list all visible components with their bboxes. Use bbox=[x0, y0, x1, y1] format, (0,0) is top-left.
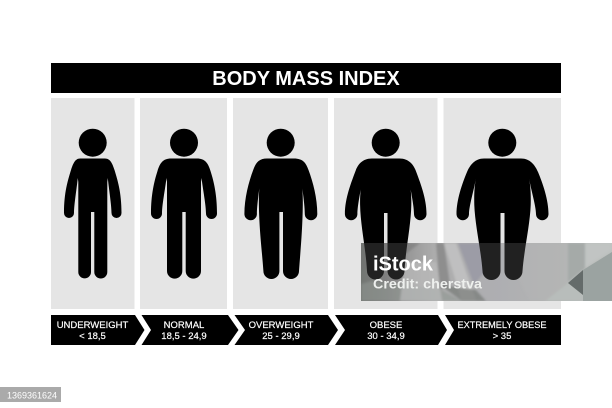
label: obese bbox=[367, 320, 405, 342]
figure: normal bbox=[151, 158, 217, 279]
label: obese: 30 - 34,9 bbox=[367, 331, 405, 342]
figure head: obese bbox=[372, 129, 400, 157]
arrow: obese to extremely obese bbox=[438, 315, 454, 345]
figure head: underweight bbox=[79, 129, 107, 157]
label: overweight bbox=[249, 320, 314, 342]
arrow: overweight to obese bbox=[328, 315, 345, 345]
panel: underweight background bbox=[51, 98, 134, 309]
figure head: extremely obese bbox=[488, 129, 516, 157]
label: overweight: 25 - 29,9 bbox=[262, 331, 300, 342]
arrow: underweight to normal bbox=[135, 315, 151, 345]
panel: obese background bbox=[334, 98, 438, 309]
label: overweight: OVERWEIGHT bbox=[249, 320, 314, 331]
figure: obese bbox=[345, 158, 426, 280]
label: obese: OBESE bbox=[370, 320, 402, 331]
label: underweight: < 18,5 bbox=[79, 331, 106, 342]
figure: underweight bbox=[64, 158, 122, 279]
label: extremely obese bbox=[458, 320, 546, 342]
watermark backdrop bbox=[361, 243, 612, 301]
label: underweight: UNDERWEIGHT bbox=[57, 320, 128, 331]
figure head: normal bbox=[170, 129, 198, 157]
category arrow bar bbox=[51, 315, 561, 345]
panel: extremely obese background bbox=[444, 98, 561, 309]
label: extremely obese: EXTREMELY OBESE bbox=[458, 320, 546, 331]
label: normal: NORMAL bbox=[164, 320, 204, 331]
watermark: iStock credit: Credit: cherstva bbox=[373, 276, 482, 292]
panel: overweight background bbox=[233, 98, 328, 309]
label: normal bbox=[161, 320, 207, 342]
panel: normal background bbox=[140, 98, 227, 309]
figure head: overweight bbox=[267, 129, 295, 157]
arrow: normal to overweight bbox=[228, 315, 245, 345]
figure: extremely obese bbox=[456, 158, 548, 280]
title bar bbox=[51, 63, 561, 93]
figure: overweight bbox=[244, 158, 317, 279]
watermark: iStock credit: iStock bbox=[373, 254, 434, 276]
label: extremely obese: > 35 bbox=[493, 331, 511, 342]
label: underweight bbox=[57, 320, 128, 342]
stock image id bbox=[0, 387, 61, 402]
watermark: iStock credit bbox=[361, 243, 612, 301]
title: BODY MASS INDEX bbox=[212, 68, 400, 90]
label: normal: 18,5 - 24,9 bbox=[161, 331, 207, 342]
stock image id: 1369361624 bbox=[7, 390, 57, 402]
